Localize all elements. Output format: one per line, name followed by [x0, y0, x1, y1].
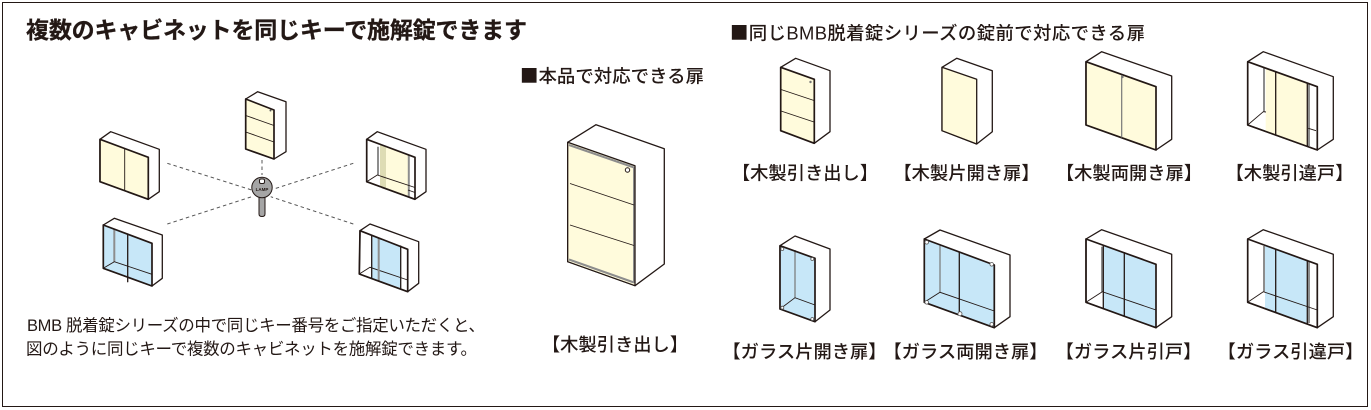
dashed connectors	[167, 160, 353, 224]
cabinet: large wood drawers	[568, 125, 664, 286]
icon: key: LAMP	[256, 187, 268, 192]
cabinet: drawers	[246, 92, 286, 159]
panel: wood double door	[1086, 52, 1172, 150]
cabinet: glass double door	[103, 218, 162, 286]
panel: wood sliding door	[1248, 52, 1333, 150]
icon: key	[252, 177, 272, 216]
text block: description: BMB 脱着錠シリーズの中で同じキー番号をご指定いただくと、	[27, 316, 485, 335]
cabinet: wood sliding door	[367, 132, 426, 199]
label: large wood drawers: 【木製引き出し】	[542, 334, 688, 355]
title: 複数のキャビネットを同じキーで施解錠できます	[26, 17, 527, 43]
panel: wood single door	[942, 58, 992, 144]
label: glass single sliding door: 【ガラス片引戸】	[1056, 341, 1201, 362]
panel: glass double door	[924, 230, 1010, 328]
label: glass double door: 【ガラス両開き扉】	[883, 341, 1048, 362]
panel: wood drawers	[781, 58, 830, 143]
label: wood double door: 【木製両開き扉】	[1056, 162, 1202, 184]
text block: description	[26, 316, 485, 358]
label: glass double sliding door: 【ガラス引違戸】	[1218, 341, 1363, 362]
panel: key diagram	[100, 92, 426, 292]
label: wood drawers: 【木製引き出し】	[732, 162, 878, 184]
label: wood single door: 【木製片開き扉】	[893, 162, 1040, 184]
cabinet: wood double door	[100, 132, 159, 199]
text block: description: 図のように同じキーで複数のキャビネットを施解錠できます。	[26, 340, 477, 358]
panel: glass single door	[780, 236, 830, 322]
label: wood sliding door: 【木製引違戸】	[1226, 162, 1353, 184]
heading: this product: ■本品で対応できる扉	[520, 62, 704, 88]
panel: glass single sliding door	[1086, 230, 1172, 328]
heading: compatible doors: ■同じBMB脱着錠シリーズの錠前で対応できる扉	[730, 20, 1145, 46]
label: glass single door: 【ガラス片開き扉】	[722, 341, 887, 362]
cabinet: glass sliding door	[359, 224, 419, 292]
panel: glass double sliding door	[1248, 230, 1333, 328]
